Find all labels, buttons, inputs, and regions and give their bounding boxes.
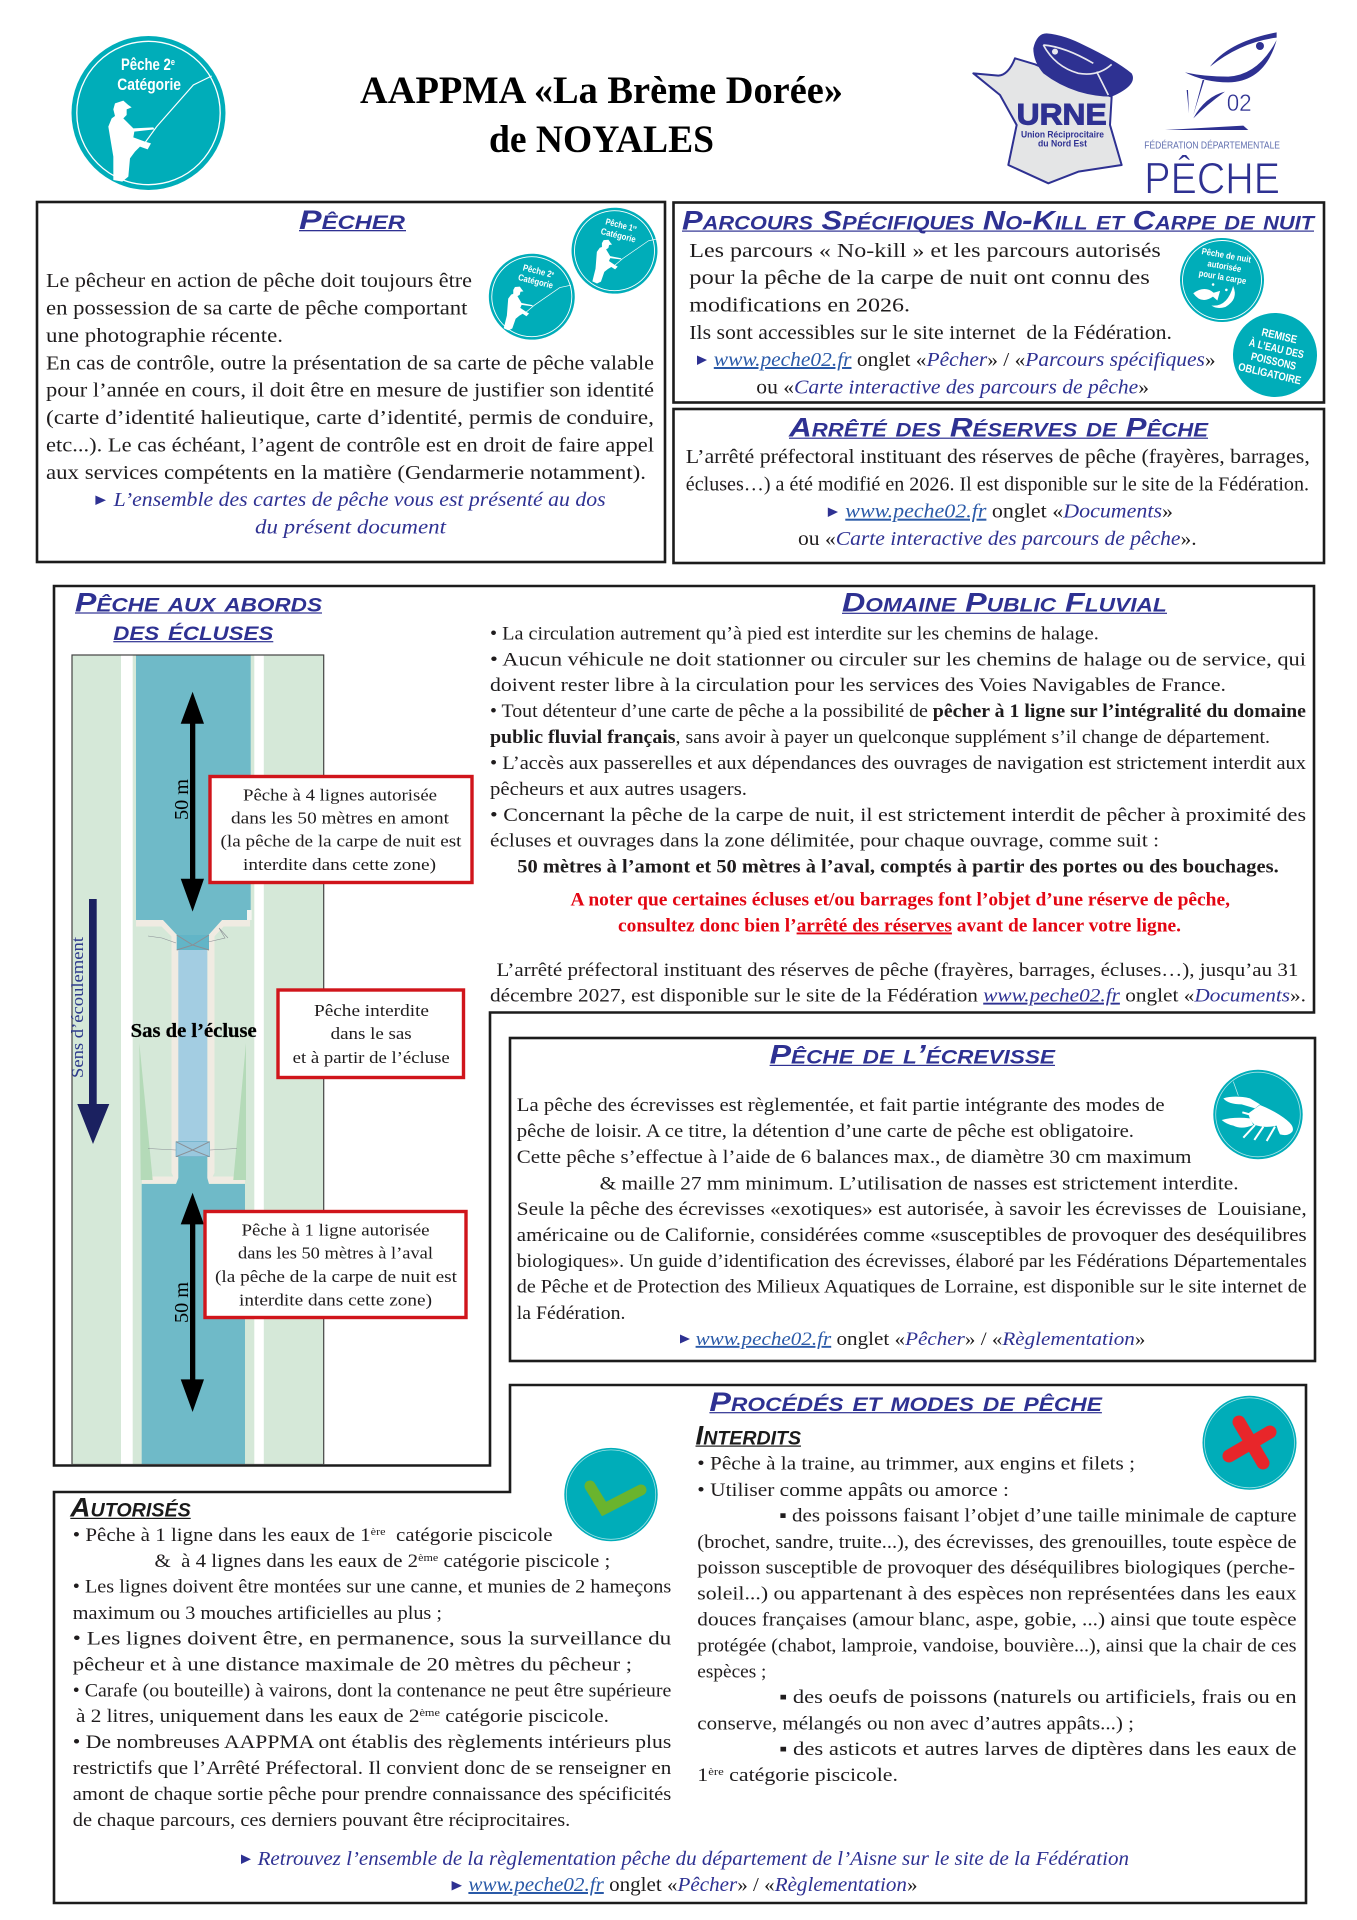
- text block: règles du domaine public fluvial: • La circulation autrement qu’à pied est interdite sur les chemins de halage.: [490, 624, 1099, 644]
- link: peche02 parcours: ou «Carte interactive des parcours de pêche »: [756, 376, 1149, 398]
- icon: croix rouge: [1202, 1396, 1296, 1490]
- panel: Pêche de l'écrevisse: [510, 1038, 1315, 1361]
- badge: remise à l'eau obligatoire: OBLIGATOIRE: [1237, 361, 1302, 387]
- text block: autorisés: à 2 litres, uniquement dans les eaux de 2: [76, 1706, 384, 1727]
- text block: interdits: (brochet, sandre, truite...), des écrevisses, des grenouilles, toute espèce de: [697, 1532, 1297, 1553]
- panel: écluses et domaine public fluvial: [54, 586, 1314, 1466]
- text block: autorisés: & à 4 lignes dans les eaux de 2: [154, 1551, 395, 1572]
- warning: réserves de pêche: consultez donc bien l’arrêté des réserves avant de lancer votre ligne.: [618, 916, 1181, 936]
- heading: Interdits: Interdits: [696, 1420, 801, 1450]
- link: peche02 règlementation: www.peche02.fr onglet « Pêcher » / «Règlementation »: [696, 1329, 1145, 1350]
- callout: pêche interdite: Pêche interdite: [314, 1001, 429, 1020]
- text block: règles du domaine public fluvial: doivent rester libre à la circulation pour les services des Voies Navigables de France.: [490, 675, 1226, 696]
- logo: Fédération départementale pêche 02: 02: [1227, 90, 1252, 117]
- text block: interdits: espèces ;: [697, 1661, 766, 1682]
- text block: Arrêté: écluses…) a été modifié en 2026. Il est disponible sur le site de la Fédération.: [686, 473, 1309, 495]
- label: Sas de l'écluse: Sas de l’écluse: [131, 1020, 257, 1042]
- text block: Parcours: Ils sont accessibles sur le site internet de la Fédération.: [689, 322, 1172, 344]
- text block: autorisés: • Carafe (ou bouteille) à vairons, dont la contenance ne peut être supérieure: [73, 1680, 671, 1701]
- callout: 1 ligne aval: [205, 1212, 466, 1318]
- heading: Autorisés: Autorisés: [69, 1493, 191, 1523]
- callout: pêche interdite: et à partir de l’écluse: [293, 1048, 450, 1067]
- text block: interdits: protégée (chabot, lamproie, vandoise, bouvière...), ainsi que la chair de ces: [697, 1636, 1297, 1656]
- text block: interdits: catégorie piscicole.: [724, 1765, 898, 1786]
- panel: Pêcher: [37, 199, 667, 562]
- text block: autorisés: catégorie piscicole.: [440, 1706, 609, 1727]
- text block: autorisés: • De nombreuses AAPPMA ont établis des règlements intérieurs plus: [73, 1732, 671, 1753]
- link: règlementation du département: Retrouvez l’ensemble de la règlementation pêche du département de l’Aisne sur le site de la Fédération: [257, 1848, 1129, 1870]
- icon: coche verte: [564, 1448, 658, 1541]
- text block: Parcours: [689, 240, 1172, 344]
- text block: règles du domaine public fluvial: • Aucun véhicule ne doit stationner ou circuler sur les chemins de halage ou de service, qui: [490, 650, 1306, 670]
- logo: Pêche 2e catégorie: Pêche 2: [121, 56, 182, 74]
- badge: pêche de nuit autorisée: Pêche de nuit: [1201, 246, 1252, 265]
- badge: pêche 1re catégorie: [562, 199, 667, 303]
- text block: écrevisse: La pêche des écrevisses est règlementée, et fait partie intégrante des modes de: [517, 1095, 1165, 1116]
- text block: interdits: 1: [697, 1765, 707, 1786]
- badge: remise à l'eau obligatoire: [1225, 305, 1325, 405]
- text block: autorisés: catégorie piscicole ;: [438, 1551, 610, 1572]
- text block: autorisés: • Pêche à 1 ligne dans les eaux de 1: [73, 1525, 343, 1546]
- text block: règles du domaine public fluvial: • Concernant la pêche de la carpe de nuit, il est strictement interdit de pêcher à proximité des: [490, 805, 1306, 826]
- arrow: 50 m aval: 50 m: [171, 1282, 193, 1323]
- text block: Parcours: pour la pêche de la carpe de nuit ont connu des: [689, 267, 1150, 289]
- panel: Arrêté des réserves de pêche: [674, 409, 1324, 563]
- badge: remise à l'eau obligatoire: REMISE: [1260, 327, 1298, 346]
- arrow: sens d'écoulement: [68, 899, 109, 1144]
- text block: autorisés: pêcheur et à une distance maximale de 20 mètres du pêcheur ;: [73, 1654, 632, 1675]
- link: règlementation du département: www.peche02.fr onglet «Pêcher» / «Règlementation »: [468, 1874, 918, 1896]
- badge: pêche 2e catégorie: [480, 245, 584, 349]
- text block: Pêcher: (carte d’identité halieutique, carte d’identité, permis de conduire,: [46, 407, 654, 429]
- heading: Pêche de l'écrevisse: Pêche de l’écrevisse: [770, 1040, 1057, 1070]
- text block: autorisés: • Les lignes doivent être, en permanence, sous la surveillance du: [73, 1629, 672, 1650]
- text block: Pêcher: pour l’année en cours, il doit être en mesure de justifier son identité: [46, 380, 654, 402]
- heading: Parcours spécifiques No-Kill et Carpe de nuit: Parcours Spécifiques No-Kill et Carpe de nuit: [682, 205, 1316, 235]
- text block: interdits: ▪ des poissons faisant l’objet d’une taille minimale de capture: [779, 1506, 1297, 1527]
- badge: pêche 1re catégorie: Pêche 1: [605, 216, 640, 234]
- callout: 4 lignes amont: [210, 776, 472, 882]
- text block: autorisés: ère: [371, 1526, 386, 1538]
- link: règlementation du département: [241, 1848, 1129, 1896]
- text block: écrevisse: Cette pêche s’effectue à l’aide de 6 balances max., de diamètre 30 cm maximum: [517, 1147, 1192, 1168]
- text block: Arrêté: L’arrêté préfectoral instituant des réserves de pêche (frayères, barrages,: [686, 446, 1310, 468]
- callout: 4 lignes amont: (la pêche de la carpe de nuit est: [220, 832, 462, 850]
- text block: Pêcher: Le pêcheur en action de pêche doit toujours être: [46, 270, 472, 292]
- logo: URNE: du Nord Est: [1038, 139, 1088, 150]
- heading: Pêche aux abords des écluses: Pêche aux abords: [75, 587, 322, 617]
- callout: cartes de pêche au dos: L’ensemble des cartes de pêche vous est présenté au dos: [113, 489, 606, 511]
- title: [360, 68, 843, 161]
- callout: 1 ligne aval: dans les 50 mètres à l’aval: [238, 1244, 433, 1262]
- text block: Pêcher: en possession de sa carte de pêche comportant: [46, 298, 468, 320]
- heading: Pêche aux abords des écluses: des écluses: [113, 616, 274, 646]
- text block: Pêcher: [46, 270, 654, 484]
- logo: Pêche 2e catégorie: [72, 36, 226, 190]
- heading: Pêcher: Pêcher: [299, 205, 405, 235]
- panel: Parcours spécifiques: [674, 202, 1325, 405]
- text block: autorisés: amont de chaque sortie pêche pour prendre connaissance des spécificités: [73, 1784, 671, 1805]
- badge: pêche de nuit autorisée: [1173, 231, 1271, 329]
- logo: Fédération départementale pêche 02: [1144, 32, 1280, 203]
- badge: pêche 2e catégorie: Catégorie: [517, 272, 554, 291]
- text block: autorisés: restrictifs que l’Arrêté Préfectoral. Il convient donc de se renseigner en: [73, 1758, 672, 1779]
- badge: pêche 2e catégorie: Pêche 2: [522, 262, 557, 280]
- logo: Pêche 2e catégorie: Catégorie: [117, 76, 181, 94]
- callout: 1 ligne aval: Pêche à 1 ligne autorisée: [242, 1220, 430, 1240]
- callout: cartes de pêche au dos: du présent document: [255, 517, 446, 539]
- callout: 4 lignes amont: interdite dans cette zone): [243, 855, 436, 874]
- text block: écrevisse: & maille 27 mm minimum. L’utilisation de nasses est strictement interdite.: [600, 1174, 1239, 1195]
- link: peche02 documents: www.peche02.fr onglet « Documents »: [845, 501, 1173, 523]
- text block: interdits: ▪ des oeufs de poissons (naturels ou artificiels, frais ou en: [779, 1687, 1297, 1708]
- text block: autorisés: ème: [419, 1707, 440, 1719]
- text block: Pêcher: aux services compétents en la matière (Gendarmerie notamment).: [46, 462, 646, 484]
- panel: Procédés et modes de pêche: [54, 1385, 1306, 1903]
- link: peche02 parcours: [697, 349, 1216, 398]
- warning: réserves de pêche: [570, 890, 1230, 936]
- arrow: 50 m amont: 50 m: [171, 779, 193, 820]
- text block: interdits: ▪ des asticots et autres larves de diptères dans les eaux de: [779, 1739, 1297, 1760]
- arrow: 50 m amont: [171, 692, 204, 912]
- callout: 1 ligne aval: (la pêche de la carpe de nuit est: [215, 1267, 457, 1286]
- text block: écrevisse: biologiques». Un guide d’identification des écrevisses, élaboré par les Fédérations Départementales: [517, 1251, 1307, 1272]
- callout: 1 ligne aval: interdite dans cette zone): [239, 1290, 432, 1310]
- title: AAPPMA «La Brème Dorée»: [360, 68, 843, 112]
- icon: écrevisse: [1213, 1070, 1303, 1159]
- callout: 4 lignes amont: Pêche à 4 lignes autorisée: [243, 786, 437, 804]
- text block: interdits: poisson susceptible de provoquer des déséquilibres biologiques (perche-: [697, 1558, 1295, 1579]
- text block: interdits: [697, 1454, 1297, 1786]
- diagram: écluse: [72, 655, 324, 1464]
- badge: pêche 2e catégorie: e: [551, 271, 555, 277]
- text block: écrevisse: [517, 1095, 1307, 1324]
- arrow: 50 m aval: [171, 1193, 204, 1412]
- text block: interdits: douces françaises (amour blanc, aspe, gobie, ...) ainsi que toute espèce: [697, 1609, 1297, 1630]
- badge: remise à l'eau obligatoire: À L’EAU DES: [1248, 336, 1305, 361]
- text block: autorisés: catégorie piscicole: [386, 1525, 553, 1546]
- arrow: sens d'écoulement: Sens d’écoulement: [68, 937, 87, 1078]
- text block: autorisés: de chaque parcours, ces derniers pouvant être réciprocitaires.: [73, 1810, 570, 1831]
- text block: autorisés: • Les lignes doivent être montées sur une canne, et munies de 2 hameçons: [73, 1577, 671, 1598]
- text block: écrevisse: la Fédération.: [517, 1303, 625, 1324]
- text block: autorisés: [73, 1525, 672, 1831]
- logo: Pêche 2e catégorie: e: [171, 57, 175, 67]
- callout: cartes de pêche au dos: [95, 489, 606, 539]
- link: peche02 parcours: www.peche02.fr onglet « Pêcher» / «Parcours spécifiques »: [714, 349, 1216, 371]
- heading: Arrêté des réserves de pêche: Arrêté des Réserves de Pêche: [788, 412, 1210, 442]
- heading: Domaine public fluvial: Domaine Public Fluvial: [842, 588, 1167, 618]
- text block: Parcours: modifications en 2026.: [689, 294, 910, 316]
- badge: pêche 1re catégorie: Catégorie: [600, 226, 637, 245]
- text block: règles du domaine public fluvial: • L’accès aux passerelles et aux dépendances des ouvrages de navigation est strictement interdit aux: [490, 753, 1307, 774]
- title: de NOYALES: [489, 117, 714, 161]
- logo: URNE: Union Réciprocitaire: [1021, 129, 1104, 140]
- text block: Pêcher: une photographie récente.: [46, 325, 283, 347]
- text block: écrevisse: américaine ou de Californie, considérées comme «susceptibles de provoquer des deséquilibres: [517, 1225, 1307, 1246]
- callout: pêche interdite: [278, 990, 464, 1078]
- text block: arrêté préfectoral: L’arrêté préfectoral instituant des réserves de pêche (frayères, barrages, écluses…), jusqu’au 31: [496, 960, 1298, 981]
- text block: Pêcher: En cas de contrôle, outre la présentation de sa carte de pêche valable: [46, 352, 654, 374]
- warning: réserves de pêche: A noter que certaines écluses et/ou barrages font l’objet d’une réserve de pêche,: [570, 890, 1230, 910]
- text block: interdits: soleil...) ou appartenant à des espèces non représentées dans les eaux: [697, 1584, 1297, 1604]
- text block: interdits: ère: [708, 1766, 724, 1778]
- callout: 4 lignes amont: dans les 50 mètres en amont: [231, 808, 449, 828]
- text block: écrevisse: pêche de loisir. A ce titre, la détention d’une carte de pêche est obligatoire.: [517, 1121, 1134, 1142]
- text block: Arrêté: [686, 446, 1310, 495]
- link: peche02 documents: [798, 501, 1197, 550]
- badge: pêche de nuit autorisée: autorisée: [1207, 258, 1242, 274]
- text block: écrevisse: Seule la pêche des écrevisses «exotiques» est autorisée, à savoir les écrevisses de Louisiane,: [517, 1199, 1307, 1220]
- logo: URNE: URNE: [1017, 98, 1107, 131]
- text block: règles du domaine public fluvial: pêcheurs et aux autres usagers.: [490, 779, 747, 800]
- text block: autorisés: ème: [418, 1552, 438, 1564]
- text block: écrevisse: de Pêche et de Protection des Milieux Aquatiques de Lorraine, est disponible sur le site internet de: [517, 1277, 1307, 1298]
- text block: interdits: conserve, mélangés ou non avec d’autres appâts...) ;: [697, 1713, 1134, 1734]
- text block: règles du domaine public fluvial: • Tout détenteur d’une carte de pêche a la possibilité de pêcher à 1 ligne sur l’intégralité du domaine: [490, 701, 1306, 722]
- text block: Pêcher: etc...). Le cas échéant, l’agent de contrôle est en droit de faire appel: [46, 434, 654, 456]
- text block: règles du domaine public fluvial: public fluvial français , sans avoir à payer un quelconque supplément s’il change de département.: [490, 727, 1270, 748]
- badge: remise à l'eau obligatoire: POISSONS: [1250, 351, 1297, 373]
- text block: règles du domaine public fluvial: écluses et ouvrages dans la zone délimitée, pour chaque ouvrage, comme suit :: [490, 830, 1159, 852]
- logo: Fédération départementale pêche 02: FÉDÉRATION DÉPARTEMENTALE: [1144, 138, 1280, 151]
- text block: autorisés: maximum ou 3 mouches artificielles au plus ;: [73, 1603, 442, 1624]
- heading: Pêche aux abords des écluses: [75, 587, 322, 646]
- logo: URNE: [973, 33, 1133, 183]
- text block: interdits: • Pêche à la traine, au trimmer, aux engins et filets ;: [697, 1454, 1135, 1475]
- text block: interdits: • Utiliser comme appâts ou amorce :: [697, 1480, 1009, 1501]
- text block: arrêté préfectoral: [490, 960, 1306, 1007]
- text block: règles du domaine public fluvial: 50 mètres à l’amont et 50 mètres à l’aval, comptés à partir des portes ou des bouchages.: [517, 856, 1279, 878]
- callout: pêche interdite: dans le sas: [331, 1024, 412, 1043]
- badge: pêche 1re catégorie: re: [632, 224, 638, 231]
- logo: Fédération départementale pêche 02: PÊCHE: [1144, 154, 1280, 203]
- heading: Procédés et modes de pêche: Procédés et modes de pêche: [709, 1387, 1103, 1417]
- link: peche02 documents: ou «Carte interactive des parcours de pêche ».: [798, 528, 1197, 550]
- badge: pêche de nuit autorisée: pour la carpe: [1198, 268, 1247, 286]
- text block: Parcours: Les parcours « No-kill » et les parcours autorisés: [689, 240, 1161, 262]
- text block: arrêté préfectoral: décembre 2027, est disponible sur le site de la Fédération www.peche02.fr onglet « Documents ».: [490, 986, 1306, 1007]
- text block: règles du domaine public fluvial: [490, 624, 1307, 878]
